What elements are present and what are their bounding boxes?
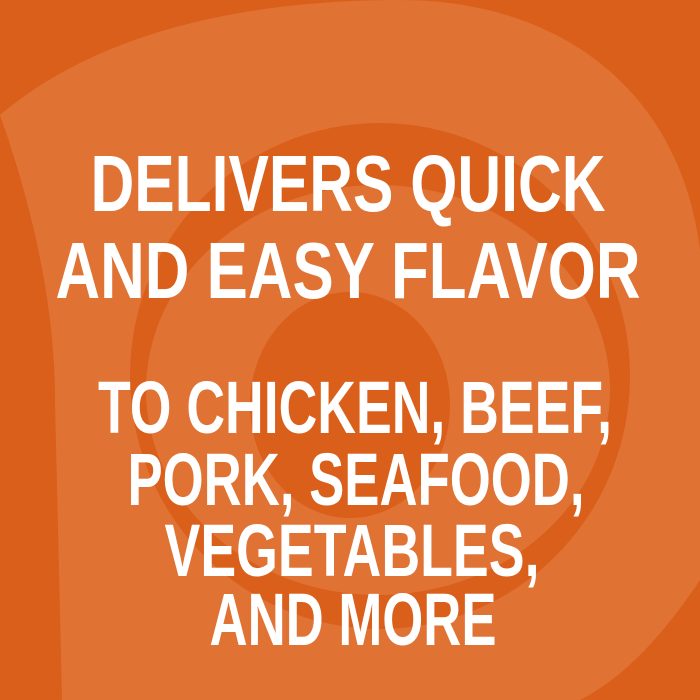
subheading text: VEGETABLES, [164, 509, 540, 592]
subheading text [98, 366, 612, 661]
subheading text: AND MORE [210, 578, 496, 661]
heading [56, 139, 640, 315]
